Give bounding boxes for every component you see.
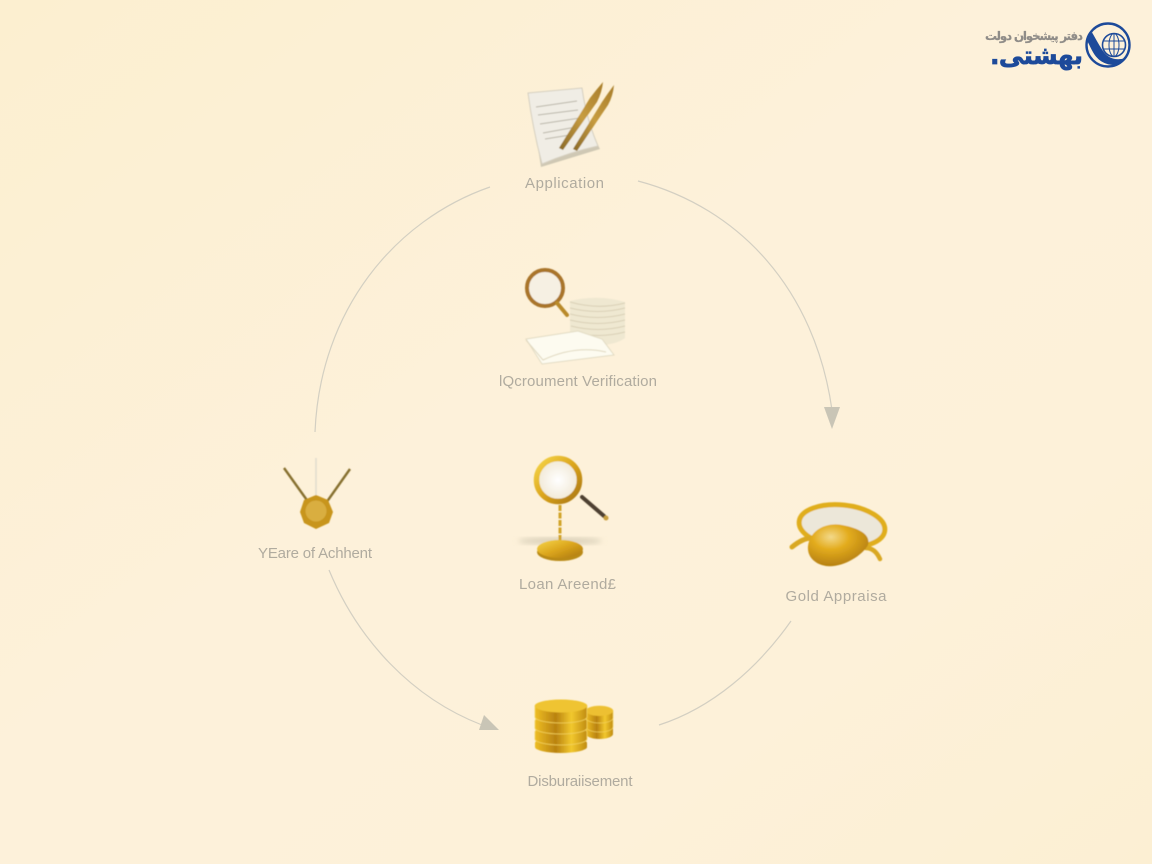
icon: gold magnifier on stand xyxy=(518,458,608,561)
arrow: year of achievement to application xyxy=(315,187,490,432)
step: loan amount xyxy=(518,458,617,593)
arrow: year of achievement to disbursement xyxy=(329,570,499,730)
icon: paper and pens xyxy=(528,82,614,167)
step: gold appraisal xyxy=(786,501,887,605)
step: year of achievement xyxy=(258,458,373,562)
logo text: office name: دفتر پیشخوان دولت xyxy=(985,29,1083,44)
icon: gold coin stacks xyxy=(535,700,613,753)
step: application xyxy=(525,82,614,192)
label: application: Application xyxy=(525,175,604,192)
label: disbursement: Disburaiisement xyxy=(528,773,633,790)
label: document verification: lQcroument Verification xyxy=(499,373,657,390)
logo mark: globe xyxy=(1086,24,1130,66)
arrow: application to gold appraisal xyxy=(638,181,840,429)
label: loan amount: Loan Areend£ xyxy=(519,576,617,593)
icon: gold nugget in ring xyxy=(792,501,887,566)
arrow: gold appraisal to disbursement xyxy=(659,621,791,725)
label: year of achievement: YEare of Achhent xyxy=(258,545,373,562)
icon: gold seal with pins xyxy=(284,458,350,529)
logo xyxy=(985,24,1130,71)
step: disbursement xyxy=(528,700,633,790)
logo text: beheshti: بهشتی. xyxy=(990,41,1083,71)
step: document verification xyxy=(499,270,657,390)
icon: magnifier over documents xyxy=(526,270,625,364)
cycle arrows xyxy=(315,181,840,730)
label: gold appraisal: Gold Appraisa xyxy=(786,588,887,605)
